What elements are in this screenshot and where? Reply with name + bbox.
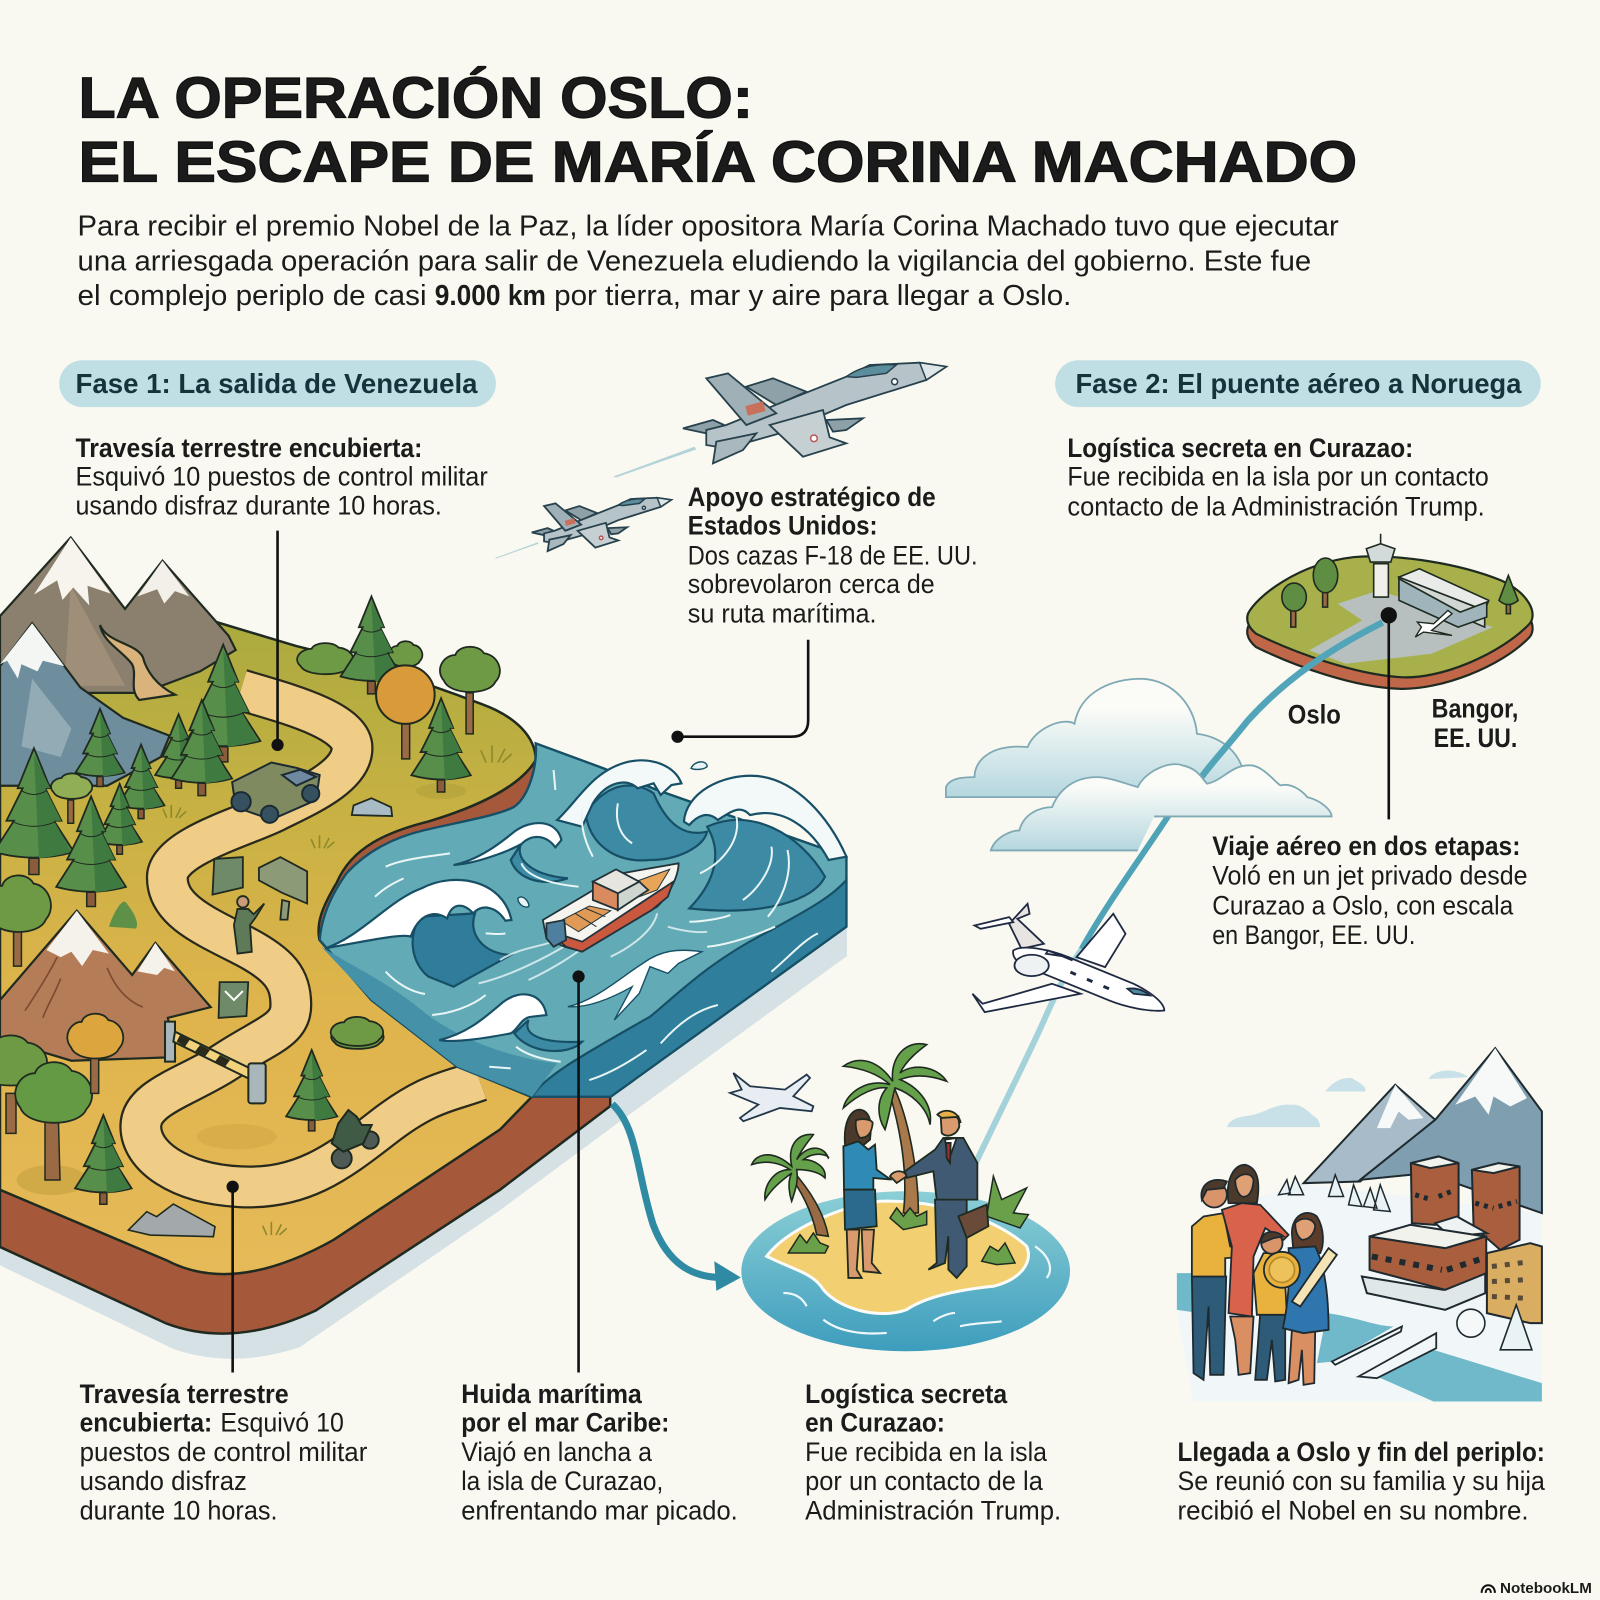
sand (767, 1201, 1028, 1314)
center note (688, 482, 978, 628)
flight route lower dark (1082, 814, 1169, 949)
intro text (78, 211, 1339, 312)
bottom note: sea: Viajó en lancha a (461, 1437, 652, 1467)
palm left (752, 1134, 828, 1236)
center note: su ruta marítima. (688, 598, 877, 628)
flight route lower (976, 949, 1082, 1163)
bottom note: land: Travesía terrestre (80, 1379, 289, 1409)
intro text: el complejo periplo de casi (78, 280, 427, 312)
airport and clouds (946, 534, 1533, 797)
bottom note: land: puestos de control militar (80, 1437, 368, 1467)
left breaker (413, 913, 511, 987)
sea block (320, 743, 846, 1097)
city hall towers (1411, 1156, 1520, 1250)
bottom note: Curazao: Administración Trump. (805, 1495, 1061, 1525)
mountain lower (0, 911, 211, 1061)
bottom note: sea: Huida marítima (461, 1379, 642, 1409)
large fighter (613, 363, 946, 477)
mountains upper (0, 538, 236, 786)
leader line: land crossing top (271, 531, 284, 751)
tree cluster (0, 596, 500, 966)
bottom note: Curazao: por un contacto de la (805, 1466, 1043, 1496)
forest and mountains (0, 538, 512, 1061)
fighter jets (495, 363, 946, 559)
military sign (219, 982, 248, 1018)
label: Oslo: Oslo (1288, 699, 1341, 729)
back cloud (946, 679, 1244, 797)
bottom note: sea (461, 1379, 738, 1525)
airport island (1247, 556, 1533, 689)
phase 1 pill (59, 360, 496, 407)
front cloud and private jet (972, 764, 1332, 1012)
palm center (843, 1044, 947, 1213)
right breaker (325, 760, 846, 1051)
NotebookLM mark: NotebookLM (1500, 1581, 1592, 1597)
label: Bangor: EE. UU. (1434, 723, 1517, 753)
center note: Apoyo estratégico de (688, 482, 936, 512)
small snowy trees (1279, 1175, 1390, 1211)
center note: Estados Unidos: (688, 511, 878, 541)
yellow building (1487, 1243, 1542, 1323)
air journey note: en Bangor, EE. UU. (1212, 920, 1415, 950)
bottom note: sea: por el mar Caribe: (461, 1408, 669, 1438)
right foam (568, 950, 702, 1020)
intro text: Para recibir el premio Nobel de la Paz, la líder opositora María Corina Machado tuvo que ejecutar (78, 211, 1339, 243)
left lower band (321, 947, 557, 1097)
grass tufts (163, 745, 512, 848)
bottom note: land: Esquivó 10 (220, 1408, 344, 1438)
clouds (1227, 1071, 1469, 1127)
water highlights (375, 770, 818, 1080)
city hall main (1362, 1225, 1486, 1310)
sea surface (320, 743, 846, 1097)
left water and river (1177, 1273, 1542, 1401)
title (79, 66, 1357, 195)
water ripples (783, 1246, 1050, 1333)
intro text: una arriesgada operación para salir de Venezuela eludiendo la vigilancia del gobierno. Este fue (78, 245, 1311, 277)
land block (0, 538, 610, 1334)
girl and boy (1254, 1213, 1337, 1385)
water (741, 1191, 1070, 1351)
center note: sobrevolaron cerca de (688, 569, 935, 599)
man (890, 1111, 988, 1278)
bottom note: Oslo arrival: recibió el Nobel en su nombre. (1178, 1495, 1529, 1525)
left top note: usando disfraz durante 10 horas. (76, 490, 442, 520)
right top note: Logística secreta en Curazao: (1067, 433, 1413, 463)
bottom note: sea: la isla de Curazao, (461, 1466, 663, 1496)
father (1192, 1180, 1249, 1380)
phase 2 pill (1055, 360, 1541, 407)
runway (1309, 590, 1493, 664)
bottom note: land (80, 1379, 368, 1525)
trees (1282, 558, 1518, 627)
mountain ridges (25, 957, 143, 1018)
label: Bangor (1432, 693, 1518, 753)
leader line: land bottom (227, 1181, 239, 1372)
arrow: sea to Curazao (612, 1104, 741, 1291)
coast cliff strip (306, 750, 546, 959)
shadow under land block (0, 898, 847, 1359)
bottom note: sea: enfrentando mar picado. (461, 1495, 738, 1525)
title: EL ESCAPE DE MARÍA CORINA MACHADO (79, 131, 1357, 195)
intro text: por tierra, mar y aire para llegar a Oslo. (554, 280, 1071, 312)
left top note: Esquivó 10 puestos de control militar (76, 462, 488, 492)
small plane (730, 1073, 813, 1121)
center breaker (586, 785, 707, 860)
label: Bangor: Bangor, (1432, 693, 1518, 723)
right top note (1067, 433, 1489, 521)
control tower (1366, 534, 1395, 597)
air journey note (1212, 831, 1528, 950)
right top note: contacto de la Administración Trump. (1067, 491, 1485, 521)
intro text: 9.000 km (435, 280, 546, 312)
left top note: Travesía terrestre encubierta: (76, 433, 422, 463)
Curazao island (730, 1044, 1070, 1351)
front cloud (991, 764, 1332, 850)
mother (1222, 1165, 1289, 1375)
mountains (1304, 1048, 1542, 1213)
grass and bush (331, 1023, 384, 1049)
left top note (76, 433, 488, 520)
flight route upper (1199, 622, 1383, 781)
air journey note: Viaje aéreo en dos etapas: (1212, 831, 1520, 861)
snow ground (1177, 1183, 1542, 1401)
air journey note: Voló en un jet privado desde (1212, 861, 1528, 891)
leader line: air route (1381, 607, 1397, 819)
shrubs (788, 1176, 1028, 1265)
small breaker (511, 843, 568, 882)
woman (843, 1110, 892, 1278)
armored vehicle (231, 762, 320, 823)
bottom note: Curazao: Fue recibida en la isla (805, 1437, 1047, 1467)
bottom note: Oslo arrival (1178, 1437, 1545, 1525)
bottom note: Curazao: Logística secreta (805, 1379, 1007, 1409)
leader line: sea (572, 970, 585, 1372)
bottom note: land: durante 10 horas. (80, 1495, 278, 1525)
checkpoints and soldier (213, 857, 307, 954)
small fighter (495, 498, 671, 559)
road (141, 690, 480, 1187)
land cliff (0, 1020, 610, 1334)
lower breaker (514, 1020, 582, 1051)
phase 2 pill: Fase 2: El puente aéreo a Noruega (1076, 368, 1522, 399)
bottom note: Oslo arrival: Se reunió con su familia y su hija (1178, 1466, 1545, 1496)
air journey note: Curazao a Oslo, con escala (1212, 890, 1513, 920)
rock (352, 798, 392, 816)
bridge (1332, 1326, 1436, 1378)
road barrier (165, 1022, 266, 1103)
bottom note: land: usando disfraz (80, 1466, 247, 1496)
front cloud outline (991, 764, 1332, 850)
bottom note: Curazao: en Curazao: (805, 1408, 945, 1438)
bottom note: Oslo arrival: Llegada a Oslo y fin del periplo: (1178, 1437, 1545, 1467)
leader line: fighters (671, 640, 808, 743)
Oslo scene (1177, 1048, 1542, 1401)
phase 1 pill: Fase 1: La salida de Venezuela (76, 368, 478, 399)
right top note: Fue recibida en la isla por un contacto (1067, 462, 1489, 492)
bottom note: Curazao (805, 1379, 1061, 1525)
private jet (972, 904, 1164, 1012)
dry grass patch (197, 1124, 277, 1149)
droplets (518, 762, 707, 907)
boat (543, 863, 679, 952)
parked plane (1415, 610, 1452, 637)
mountain snow (46, 911, 175, 975)
land surface (0, 621, 536, 1274)
lower trees and barrier (0, 1014, 383, 1237)
motorcycle (332, 1110, 379, 1168)
center note: Dos cazas F-18 de EE. UU. (688, 540, 978, 570)
bottom note: land: encubierta: (80, 1408, 212, 1438)
title: LA OPERACIÓN OSLO: (79, 66, 753, 130)
rock group (128, 1204, 215, 1237)
dark front band (532, 880, 846, 1097)
snowy trees (1457, 1305, 1532, 1350)
terminal (1399, 569, 1489, 627)
grass tuft (263, 1222, 287, 1235)
